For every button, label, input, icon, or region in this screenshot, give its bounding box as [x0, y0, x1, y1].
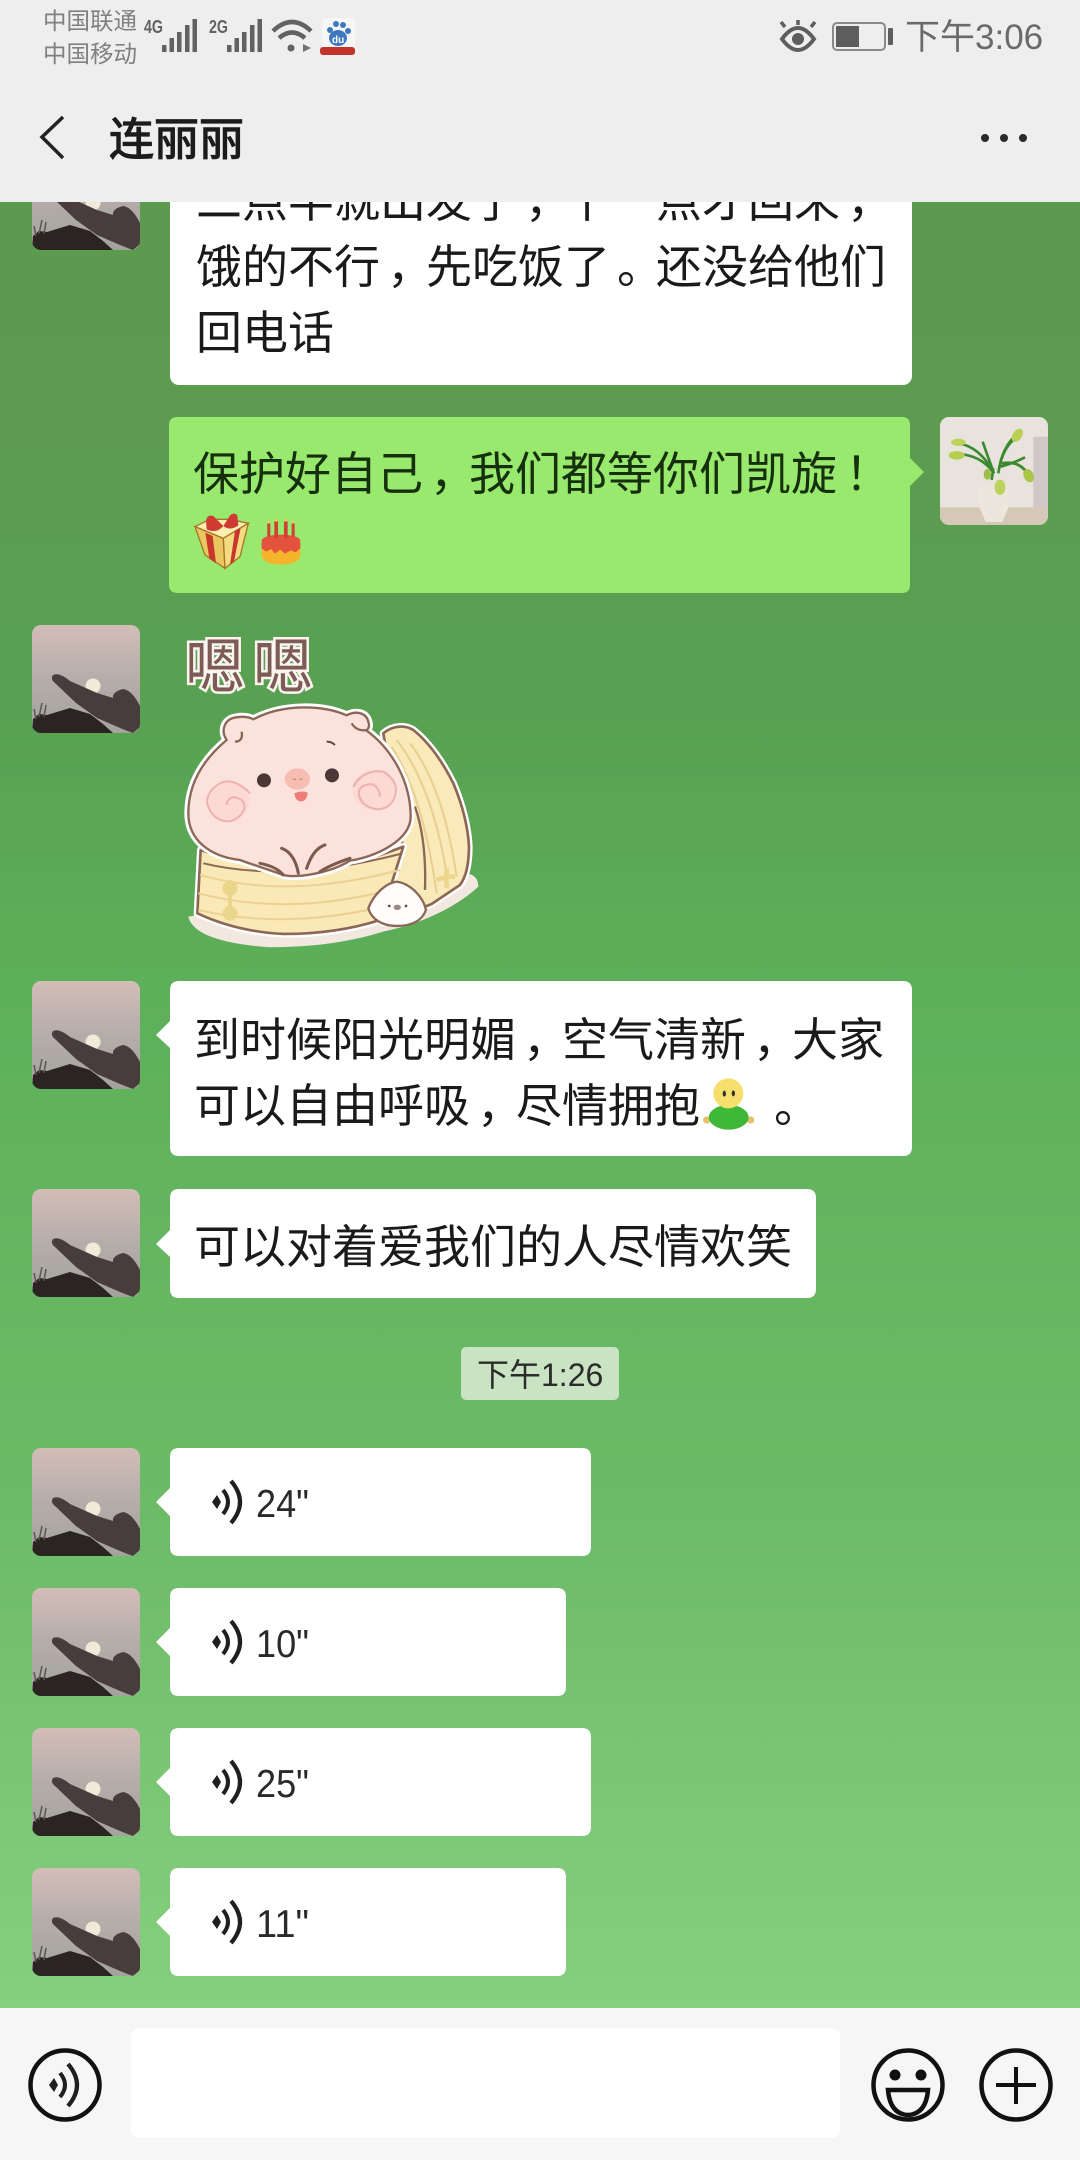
incoming message bubble	[156, 1189, 816, 1298]
emoji button	[874, 2050, 942, 2120]
carrier labels	[43, 8, 137, 67]
partner avatar	[32, 1588, 140, 1696]
wifi icon	[273, 22, 311, 52]
timestamp	[461, 1347, 619, 1400]
signal icons	[144, 17, 262, 52]
carrier labels: 中国联通	[43, 8, 137, 34]
voice message 10 seconds: 10"	[256, 1623, 309, 1666]
pig body	[188, 707, 411, 876]
back arrow	[42, 117, 63, 158]
incoming message bubble	[156, 981, 912, 1156]
pig sticker	[185, 634, 478, 947]
partner avatar	[32, 981, 140, 1089]
timestamp: 下午1:26	[477, 1357, 603, 1393]
voice button	[30, 2050, 100, 2120]
battery icon	[833, 23, 893, 50]
emoji: green figure	[703, 1078, 754, 1130]
incoming message bubble: 。	[774, 1080, 820, 1132]
voice message 10 seconds	[156, 1588, 566, 1696]
sticker text: 嗯嗯	[185, 634, 321, 701]
stems and leaves	[962, 437, 1026, 480]
small bun	[368, 882, 426, 926]
partner avatar	[32, 1448, 140, 1556]
contact name: 连丽丽	[109, 114, 244, 165]
outgoing green message bubble: 保护好自己，我们都等你们凯旋！	[193, 448, 891, 500]
voice message 25 seconds	[156, 1728, 591, 1836]
partner avatar, clipped	[32, 142, 140, 250]
voice message 24 seconds: 24"	[256, 1483, 309, 1526]
clock: 下午3:06	[905, 18, 1043, 57]
signal icons: 4G	[144, 17, 163, 37]
partner avatar	[32, 1728, 140, 1836]
baidu app icon	[320, 18, 355, 55]
steamer basket	[197, 847, 403, 934]
voice message 25 seconds: 25"	[256, 1763, 309, 1806]
top bar	[0, 0, 1080, 202]
incoming message bubble: 可以自由呼吸，尽情拥抱	[194, 1080, 700, 1132]
pig face	[207, 768, 396, 822]
incoming message bubble, clipped by header: 二点半就出发了，十一点才回来，	[196, 175, 893, 227]
voice message 11 seconds	[156, 1868, 566, 1976]
incoming message bubble: 可以对着爱我们的人尽情欢笑	[194, 1221, 792, 1273]
carrier labels: 中国移动	[43, 41, 137, 67]
text input	[131, 2028, 840, 2138]
partner avatar	[32, 625, 140, 733]
steamer lid	[383, 727, 469, 923]
voice message 11 seconds: 11"	[256, 1903, 309, 1946]
sticker shadow	[188, 873, 478, 947]
emoji: cake	[262, 518, 300, 565]
partner avatar	[32, 1868, 140, 1976]
partner avatar	[32, 1189, 140, 1297]
bottom input bar	[0, 2008, 1080, 2160]
incoming message bubble, clipped by header	[170, 150, 912, 385]
incoming message bubble, clipped by header: 饿的不行，先吃饭了。还没给他们	[196, 241, 886, 293]
incoming message bubble, clipped by header: 回电话	[196, 307, 334, 359]
eye comfort icon	[781, 20, 815, 50]
pig hands	[260, 845, 350, 875]
vase	[980, 507, 1008, 522]
emoji: gift	[195, 514, 248, 568]
outgoing green message bubble	[169, 417, 924, 593]
voice message 24 seconds	[156, 1448, 591, 1556]
my avatar: plant in vase	[940, 417, 1048, 525]
incoming message bubble: 到时候阳光明媚，空气清新，大家	[194, 1014, 884, 1066]
plus button	[982, 2050, 1050, 2120]
more menu	[981, 134, 1027, 142]
signal icons: 2G	[209, 17, 228, 37]
baidu app icon: du	[332, 35, 344, 46]
